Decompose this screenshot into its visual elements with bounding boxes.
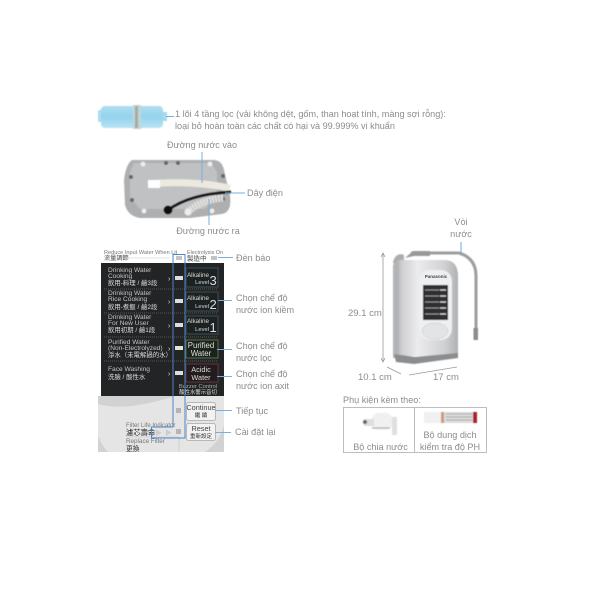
- curved shading: [98, 396, 224, 452]
- text: faucet label: [450, 217, 472, 239]
- panel: black mode area: [101, 263, 224, 396]
- button: alkaline 2: Level: [195, 304, 209, 310]
- text: alkaline mode: [236, 293, 294, 315]
- dimension: depth arrow: [387, 367, 401, 374]
- text: buzzer control: 酸性水響示音切: [179, 388, 217, 396]
- text: alkaline mode: nước ion kiềm: [236, 305, 294, 315]
- button: reset: 重新設定: [190, 432, 212, 440]
- dimension: height arrow: [381, 253, 385, 362]
- dimension: width arrow: [409, 367, 457, 375]
- button: continue: Continue: [186, 403, 216, 412]
- text: reset: Cài đặt lại: [235, 427, 275, 437]
- faucet leader line: [460, 242, 462, 255]
- screen buttons: [440, 290, 446, 314]
- panel: rows text: 飲用初期 / 鹼1段: [108, 325, 156, 334]
- panel: rows text: Drinking Water: [108, 267, 152, 274]
- button: reset: Reset: [191, 424, 211, 433]
- text: pH kit label: [420, 430, 480, 452]
- text: purified mode: nước lọc: [236, 353, 272, 363]
- icon: filter cartridge: [98, 105, 167, 129]
- panel: rows text: (Non-Electrolyzed): [108, 345, 163, 352]
- panel: rows text: Face Washing: [108, 366, 150, 373]
- button: alkaline 3: Level: [195, 280, 209, 286]
- outlet leader line: [208, 199, 210, 225]
- button: alkaline 3: [186, 268, 218, 288]
- text: filter life indicator: [126, 408, 181, 453]
- button: reset: [186, 424, 216, 440]
- inlet leader line: [201, 152, 203, 183]
- text: faucet label: Vòi: [454, 217, 468, 227]
- row indicators: ›: [168, 371, 171, 378]
- panel: lower grey area: [98, 396, 224, 452]
- text: acidic mode: Chọn chế độ: [236, 369, 288, 379]
- image: water ionizer device: [393, 251, 478, 364]
- text: depth: 10.1 cm: [358, 372, 392, 383]
- text: pH kit label: kiểm tra độ PH: [420, 442, 480, 452]
- panel: control panel: [98, 250, 224, 453]
- panel: rows text: 飲用-料理 / 鹼3段: [108, 278, 158, 287]
- button: alkaline 2: Alkaline: [187, 295, 209, 302]
- screen rows: [425, 290, 439, 314]
- panel: rows text: 洗臉 / 酸性水: [108, 372, 146, 381]
- text: purified mode: Chọn chế độ: [236, 341, 288, 351]
- text: filter description: 1 lõi 4 tầng lọc (vải không dệt, gốm, than hoạt tính, màng sợi rỗng):: [175, 109, 446, 119]
- panel: accessories box: [344, 408, 486, 452]
- heading: water inlet label: Đường nước vào: [167, 140, 237, 150]
- text: filter life indicator: ▶: [165, 429, 172, 437]
- image: water splitter: [363, 413, 397, 435]
- screen: [423, 285, 448, 320]
- panel header: Reduce Input Water When Lit: [104, 250, 178, 256]
- filter connector line: [166, 116, 174, 118]
- text: alkaline mode: Chọn chế độ: [236, 293, 288, 303]
- text: filter life indicator: 更換: [126, 444, 140, 453]
- front panel: [419, 270, 452, 340]
- panel header: 製造中: [187, 254, 206, 262]
- row indicators: [168, 276, 183, 378]
- button: alkaline 3: 3: [210, 273, 217, 288]
- panel: rows text: Cooking: [108, 273, 133, 280]
- panel: rows text: Rice Cooking: [108, 296, 148, 303]
- button: acidic water: [186, 364, 218, 382]
- brand name: Panasonic: [425, 274, 448, 279]
- panel: rows text: Drinking Water: [108, 290, 152, 297]
- row indicators: ›: [168, 323, 171, 330]
- image: device underside: [124, 160, 231, 218]
- text: indicator light: Đèn báo: [236, 253, 270, 263]
- text: filter description: [175, 109, 446, 131]
- text: filter life indicator: Filter Life Indicator: [126, 423, 175, 429]
- row indicators: ›: [168, 346, 171, 353]
- text: height: 29.1 cm: [348, 308, 382, 319]
- lower oval controls: [422, 323, 448, 339]
- button: continue: [186, 402, 216, 420]
- device body: [393, 260, 458, 356]
- image: pH test bottle: [424, 412, 477, 423]
- faucet tip: [474, 328, 478, 340]
- text: buzzer control: Buzzer Control: [179, 384, 217, 390]
- text: purified mode: [236, 341, 288, 363]
- button: alkaline 1: Level: [195, 327, 209, 333]
- button: alkaline 1: [186, 316, 218, 335]
- text: filter life indicator: ▶: [155, 429, 162, 437]
- button: alkaline 2: 2: [210, 297, 217, 312]
- panel header: 流量調節: [104, 254, 129, 262]
- text: power cord label: Dây điện: [247, 188, 283, 198]
- panel: rows text: 飲用-煮飯 / 鹼2段: [108, 302, 158, 311]
- panel: rows text: Purified Water: [108, 339, 150, 346]
- leader lines to labels: [215, 258, 233, 432]
- rear bracket: [393, 254, 404, 263]
- text: faucet label: nước: [450, 229, 472, 239]
- button: alkaline 1: 1: [210, 320, 217, 335]
- button: alkaline 1: Alkaline: [187, 318, 209, 325]
- row indicators: ›: [168, 276, 171, 283]
- text: continue: Tiếp tục: [236, 406, 268, 416]
- text: water outlet label: Đường nước ra: [176, 226, 241, 236]
- button: alkaline 3: Alkaline: [187, 272, 209, 279]
- button: purified water: [186, 340, 218, 358]
- panel header: Electrolysis On: [187, 250, 223, 256]
- blue indicator bracket: [152, 254, 185, 438]
- button: purified water: Purified: [188, 341, 214, 350]
- button: purified water: Water: [191, 349, 212, 358]
- base: [394, 353, 458, 364]
- text: buzzer control: [179, 384, 217, 396]
- heading: accessories: Phụ kiện kèm theo:: [343, 395, 421, 405]
- text: acidic mode: nước ion axit: [236, 381, 289, 391]
- text: filter life indicator: Replace Filter: [126, 438, 165, 445]
- row indicators: ›: [168, 299, 171, 306]
- text: pH kit label: Bộ dung dịch: [423, 430, 477, 440]
- text: filter life indicator: 濾芯壽命: [126, 428, 156, 437]
- power cord leader: [225, 192, 245, 194]
- button: continue: 繼 續: [195, 411, 208, 419]
- panel: rows text: Drinking Water: [108, 314, 152, 321]
- button: acidic water: Water: [191, 373, 211, 382]
- text: splitter label: Bộ chia nước: [353, 442, 408, 452]
- panel: rows text: 淨水（未電解過的水）: [108, 350, 172, 359]
- button: acidic water: Acidic: [191, 365, 211, 374]
- panel header: [104, 250, 223, 262]
- faucet pipe: [411, 253, 476, 330]
- panel: rows text: [104, 267, 217, 381]
- text: filter description: loại bỏ hoàn toàn các chất có hại và 99.999% vi khuẩn: [175, 121, 395, 131]
- top fitting: [405, 251, 430, 258]
- text: acidic mode: [236, 369, 289, 391]
- panel: rows text: For New User: [108, 320, 149, 327]
- text: width: 17 cm: [433, 372, 459, 383]
- button: alkaline 2: [186, 292, 218, 312]
- side shading: [393, 261, 399, 358]
